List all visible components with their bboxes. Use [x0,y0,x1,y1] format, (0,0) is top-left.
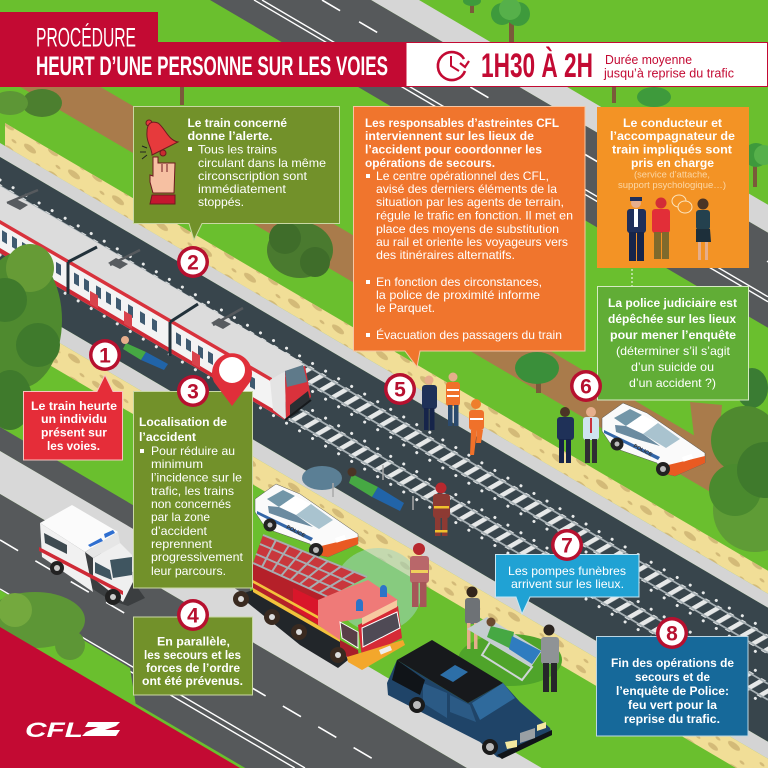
bushes in front of train [0,244,62,430]
duration value: 1H30 À 2H [481,47,593,85]
text: Fin des opérations de [611,656,734,670]
panel: 1 train hits individual [24,375,122,460]
figures: conductor, attendant, support [627,195,711,261]
marker 3: 3 [187,380,199,404]
text: d’un accident ?) [629,376,716,390]
text: reprise du trafic. [624,712,720,726]
marker 7 [551,529,583,561]
text: En parallèle, [157,634,230,648]
brown dirt near police car [690,402,722,472]
text: pris en charge [631,156,714,170]
text: le Parquet. [376,301,435,315]
panel: 3 localisation [134,392,252,588]
header: title ribbon [0,12,406,87]
panel: 2 train gives alert [134,106,340,240]
marker 1 [89,339,121,371]
railway track 2 [0,227,768,706]
trees [180,0,768,393]
text: En fonction des circonstances, [376,275,542,289]
text: dépêchée sur les lieux [608,312,736,326]
firefighters [410,482,450,607]
header: duration box [406,42,768,86]
text [139,415,244,578]
group of CFL responders [422,372,484,455]
marker 5: 5 [394,378,406,402]
duration caption: jusqu’à reprise du trafic [603,66,734,80]
text [142,634,243,688]
text: support psychologique…) [618,180,726,190]
CFL logo: CFL [25,719,83,742]
text [365,116,573,342]
text: situation par les agents de terrain, [376,195,564,209]
police officer and inspector [557,407,599,463]
text: La police judiciaire est [608,296,737,310]
marker 4 [177,599,209,631]
text [611,656,734,726]
text: pour mener l’enquête [610,328,736,342]
text: reprennent [151,537,213,551]
text: Localisation de [139,415,227,429]
text: Le train heurte [31,399,117,413]
text: l’accident [139,430,196,444]
marker 6 [570,370,602,402]
marker 8: 8 [666,622,678,646]
text [608,296,737,390]
victim lying on the track [121,336,168,370]
text: Le centre opérationnel des CFL, [376,169,549,183]
text: l’accompagnateur de [610,129,735,143]
text [508,564,626,591]
text: au rail et oriente les voyageurs vers [376,235,568,249]
text: forces de l’ordre [146,661,240,675]
text: (déterminer s’il s’agit [616,344,731,358]
text: progressivement [151,550,244,564]
text: les secours et les [144,648,241,662]
funeral staff with stretcher [458,586,562,692]
text: non concernés [151,497,231,511]
text: arrivent sur les lieux. [511,577,624,591]
ambulance [39,505,145,606]
panel: 7 funeral services [496,554,639,614]
text: interviennent sur les lieux de [365,129,534,143]
title: heurt: HEURT D’UNE PERSONNE SUR LES VOIES [36,51,388,81]
marker 6: 6 [580,376,592,398]
text: Le train concerné [188,116,287,130]
hearse [387,640,552,759]
panel: driver and attendant [597,107,749,268]
marker 7: 7 [561,534,573,558]
text: leur parcours. [151,564,226,578]
light halo around fire truck [334,548,422,632]
text: circonscription sont [198,169,308,183]
icon: clock [438,52,469,80]
bushes [0,89,768,408]
left hedge bottom [0,592,85,660]
railway track 1 [0,180,768,659]
text: l’accident pour coordonner les [365,142,542,156]
text: par la zone [151,510,210,524]
text: d’accident [151,524,208,538]
text: présent sur [41,426,107,440]
police car 2: POLICE [632,443,653,459]
panel: 6 judicial police [598,286,748,400]
text: avisé des derniers éléments de la [376,182,557,196]
text: feu vert pour la [628,698,717,712]
marker 5 [384,373,416,405]
text: Pour réduire au [151,444,235,458]
text: l’enquête de Police: [616,684,729,698]
grass corner bottom left [0,590,136,706]
text [31,399,117,453]
marker 8 [656,617,688,649]
duration caption [603,53,734,80]
text: Les pompes funèbres [508,564,626,578]
text: l’incidence sur le [151,470,242,484]
barriers and stretcher victim [333,465,413,511]
text: Les responsables d’astreintes CFL [365,116,559,130]
text: train impliqués sont [612,142,732,156]
title: procédure: PROCÉDURE [36,22,136,52]
police car 1 [255,484,358,557]
train [0,186,311,420]
blue tent [302,466,342,490]
text: des itinéraires alternatifs. [376,248,515,262]
fire truck [233,535,405,670]
text: place des moyens de substitution [376,222,559,236]
text: régule le trafic en fonction. Il met en [376,208,573,222]
text [188,116,326,209]
text: un individu [41,412,107,426]
text: donne l’alerte. [188,129,272,143]
text: d’un suicide ou [631,360,714,374]
marker 2 [177,246,209,278]
text: Évacuation des passagers du train [376,327,562,342]
text: trafic, les trains [151,484,234,498]
panel: 8 end of operations [596,636,748,736]
marker 4: 4 [187,604,199,628]
icon: bell and hand [140,120,178,204]
duration caption: Durée moyenne [605,53,692,67]
text: Tous les trains [198,142,277,156]
text [610,116,735,190]
text: minimum [151,457,203,471]
text: secours et de [635,670,710,684]
panel: 4 parallel emergency services [134,617,252,695]
police car 1: POLICE [285,524,306,540]
red corner triangle [0,627,240,768]
right big bush [709,406,768,552]
text: stoppés. [198,195,244,209]
dotted connector [631,269,633,286]
marker 2: 2 [187,252,199,274]
text: la police de proximité informe [376,288,540,302]
text: les voies. [47,439,100,453]
police car 2 [602,403,705,476]
text: (service d’attache, [634,170,710,180]
marker 3 [177,375,209,407]
text: circulant dans la même [198,156,326,170]
text: ont été prévenus. [142,674,243,688]
icon: location pin [212,353,252,406]
text: opérations de secours. [365,156,495,170]
text: immédiatement [198,182,287,196]
CFL logo [25,719,120,742]
text: Le conducteur et [623,116,722,130]
panel: 5 responsables CFL [354,106,585,367]
marker 1: 1 [99,344,111,368]
